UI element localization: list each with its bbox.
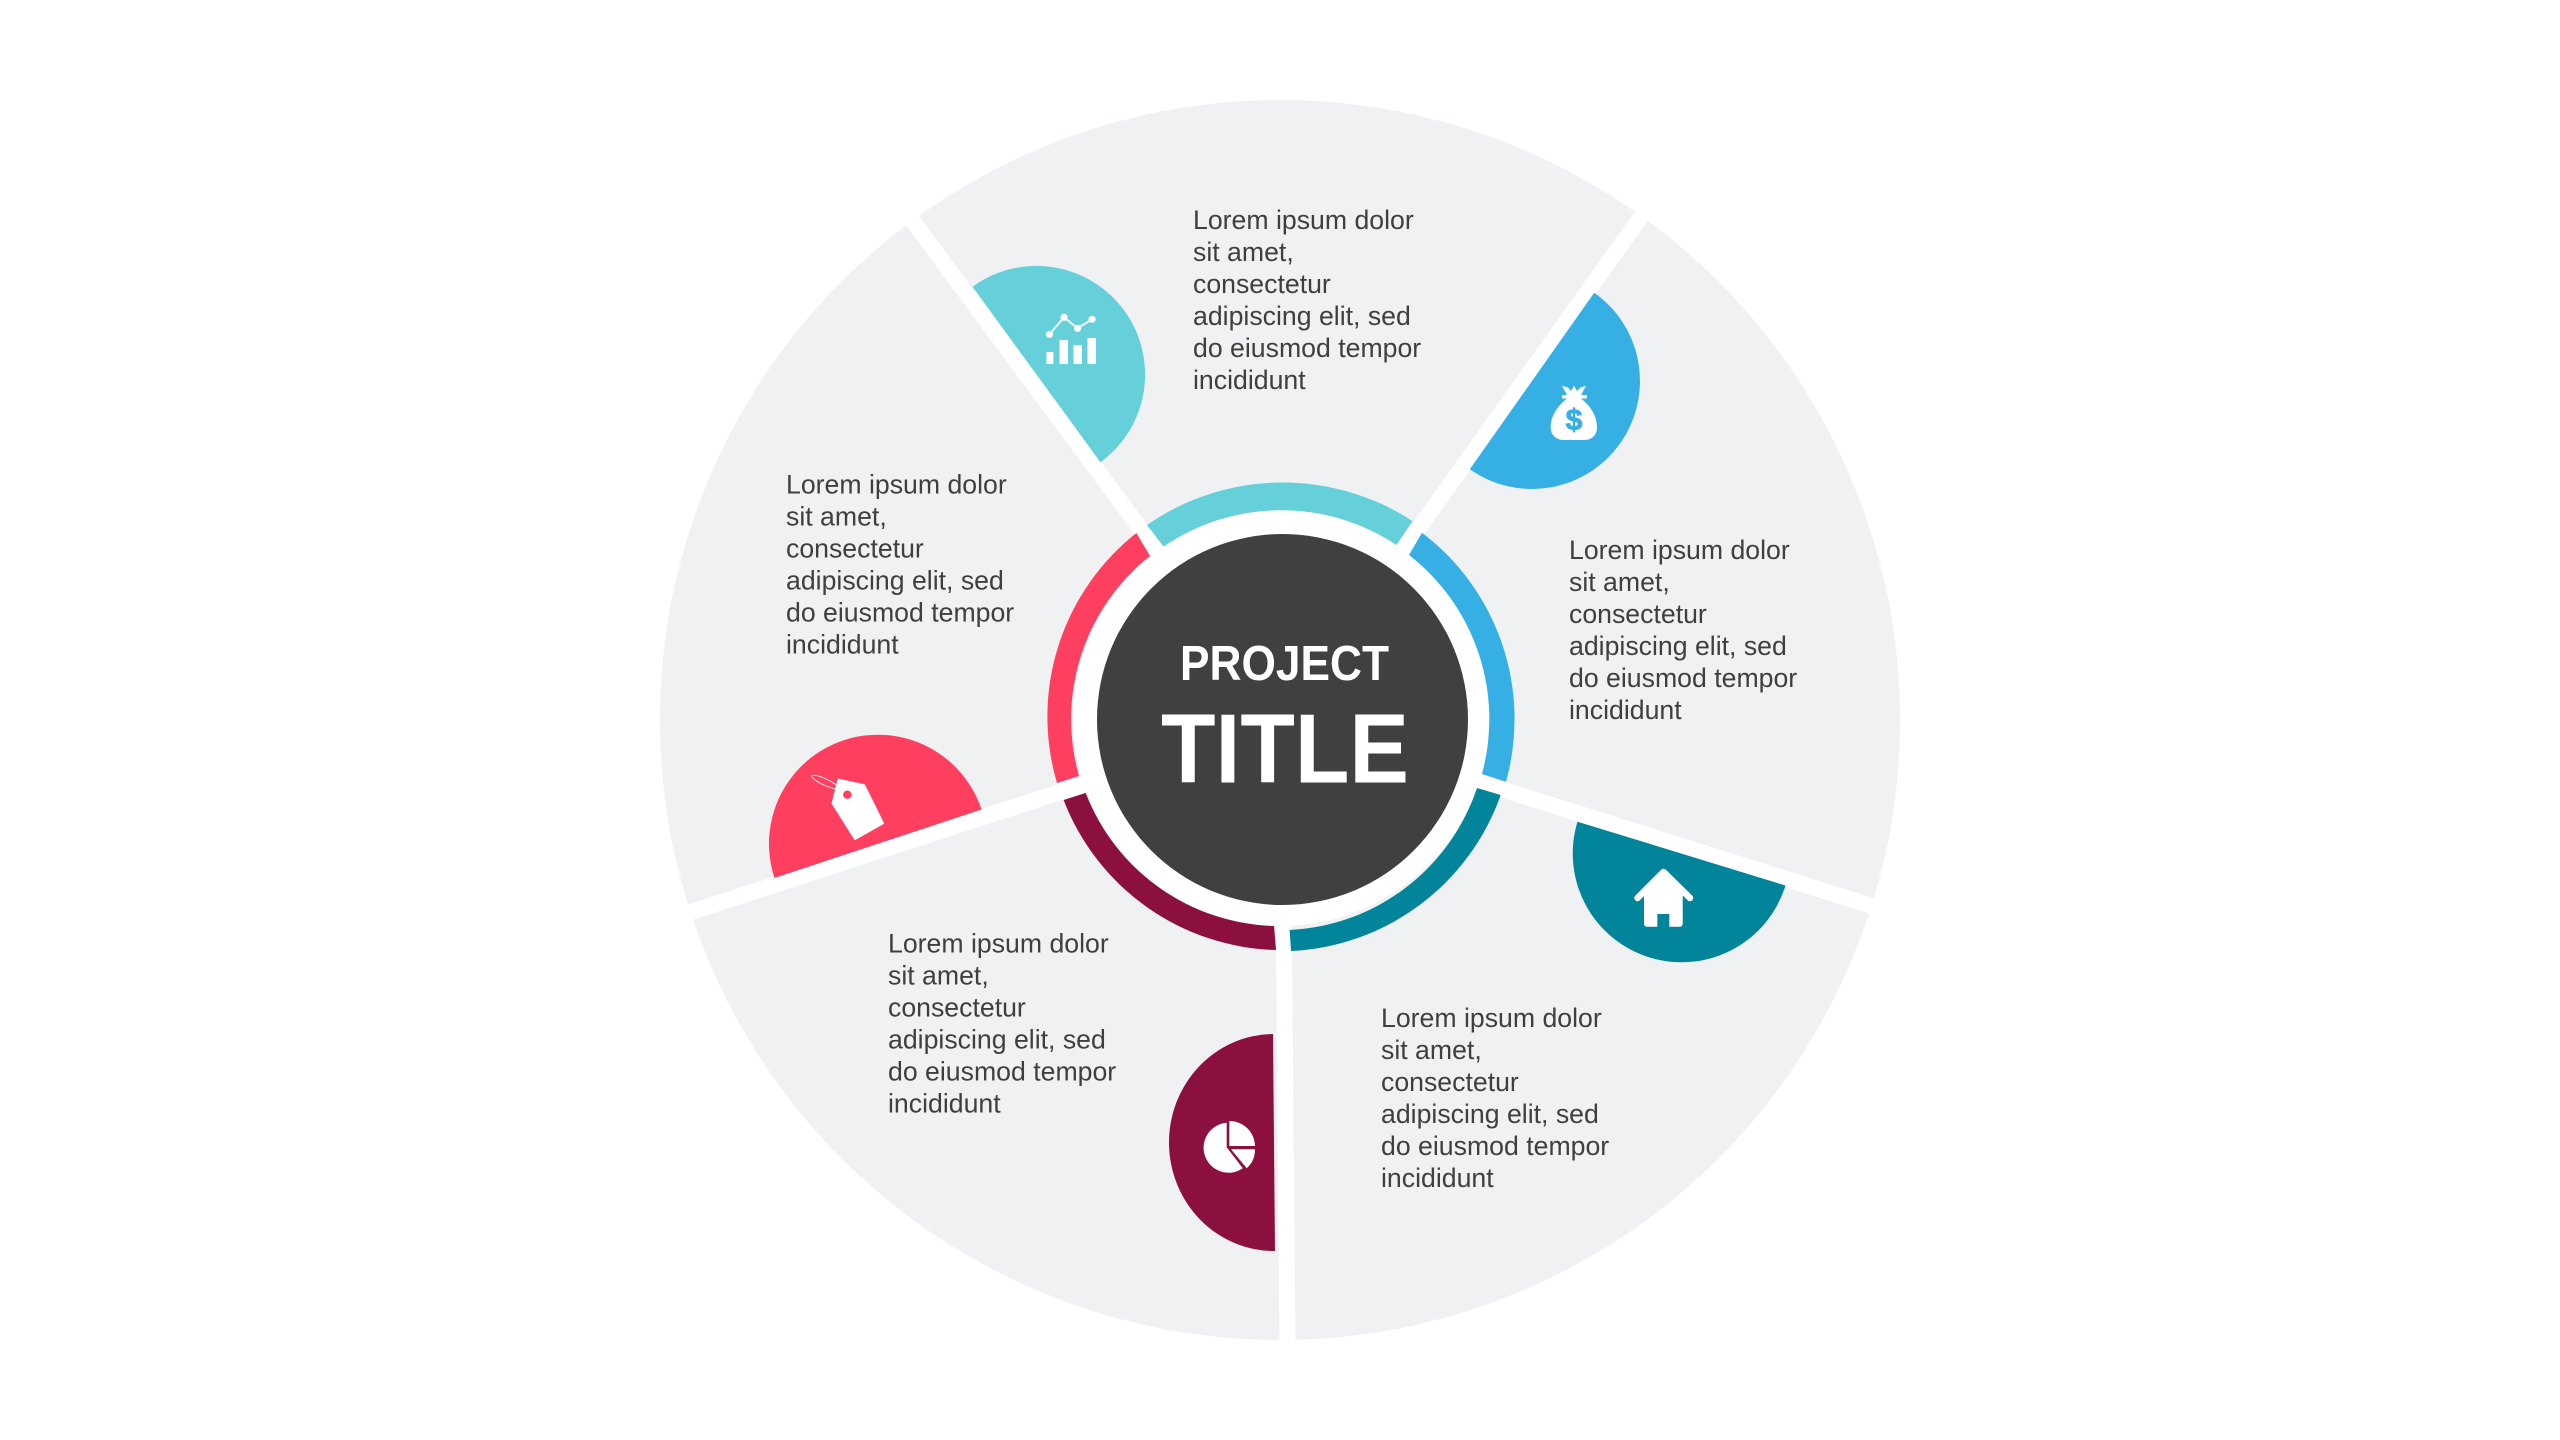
title: PROJECT TITLE: TITLE: [1161, 694, 1409, 804]
text block: right segment: Lorem ipsum dolor: [1569, 535, 1790, 565]
ring arc: maroon: [1064, 793, 1276, 950]
spoke dividers between the five segments: [616, 150, 1950, 1420]
segment: maroon semicircle with pie icon: [1169, 1034, 1275, 1251]
ring arc: teal: [1147, 483, 1412, 547]
white hub behind ring: [1073, 510, 1489, 926]
text block: left segment: incididunt: [786, 630, 899, 660]
text block: left segment: Lorem ipsum dolor: [786, 470, 1007, 500]
icon: house: [1638, 872, 1690, 927]
text block: lower right segment: incididunt: [1381, 1163, 1494, 1193]
text block: top segment: adipiscing elit, sed: [1193, 301, 1411, 331]
ring arc: deep teal: [1290, 788, 1501, 951]
text block: lower left segment: do eiusmod tempor: [888, 1056, 1116, 1086]
segment: deep teal semicircle with house icon: [1573, 822, 1786, 962]
segment: teal semicircle with chart icon: [973, 266, 1145, 462]
icon: pie chart: [1204, 1121, 1255, 1173]
text block: lower left segment: incididunt: [888, 1088, 1001, 1118]
text block: left segment: adipiscing elit, sed: [786, 566, 1004, 596]
text block: top segment: sit amet,: [1193, 237, 1294, 267]
icon: bar and line chart: [1046, 314, 1096, 364]
segment: blue semicircle with money bag icon: [1470, 293, 1640, 489]
text block: lower left segment: consectetur: [888, 992, 1026, 1022]
text block: lower right segment: adipiscing elit, sed: [1381, 1099, 1599, 1129]
text block: lower left segment: adipiscing elit, sed: [888, 1024, 1106, 1054]
segment: red semicircle with tag icon: [769, 735, 982, 878]
panel: outer grey wheel: [660, 100, 1900, 1340]
text block: lower right segment: sit amet,: [1381, 1035, 1482, 1065]
text block: lower left segment: Lorem ipsum dolor: [888, 928, 1109, 958]
text block: right segment: do eiusmod tempor: [1569, 663, 1797, 693]
text block: lower right segment: consectetur: [1381, 1067, 1519, 1097]
text block: lower right segment: do eiusmod tempor: [1381, 1131, 1609, 1161]
text block: top segment: Lorem ipsum dolor: [1193, 205, 1414, 235]
text block: top segment: incididunt: [1193, 365, 1306, 395]
text block: left segment: sit amet,: [786, 502, 887, 532]
text block: right segment: adipiscing elit, sed: [1569, 631, 1787, 661]
text block: right segment: incididunt: [1569, 695, 1682, 725]
text block: left segment: consectetur: [786, 534, 924, 564]
icon: money bag: [1551, 386, 1597, 440]
text block: right segment: consectetur: [1569, 599, 1707, 629]
text block: right segment: sit amet,: [1569, 567, 1670, 597]
text block: left segment: do eiusmod tempor: [786, 598, 1014, 628]
title: PROJECT TITLE: [1161, 637, 1409, 804]
text block: lower right segment: Lorem ipsum dolor: [1381, 1003, 1602, 1033]
title: PROJECT TITLE: PROJECT: [1180, 637, 1389, 691]
ring arc: red: [1047, 533, 1150, 783]
ring arc: blue: [1409, 533, 1515, 782]
icon: price tag: [811, 773, 883, 839]
text block: lower left segment: sit amet,: [888, 960, 989, 990]
centre dark circle: [1097, 534, 1468, 905]
icon: money bag: $: [1566, 404, 1583, 437]
text block: top segment: consectetur: [1193, 269, 1331, 299]
text block: top segment: do eiusmod tempor: [1193, 333, 1421, 363]
